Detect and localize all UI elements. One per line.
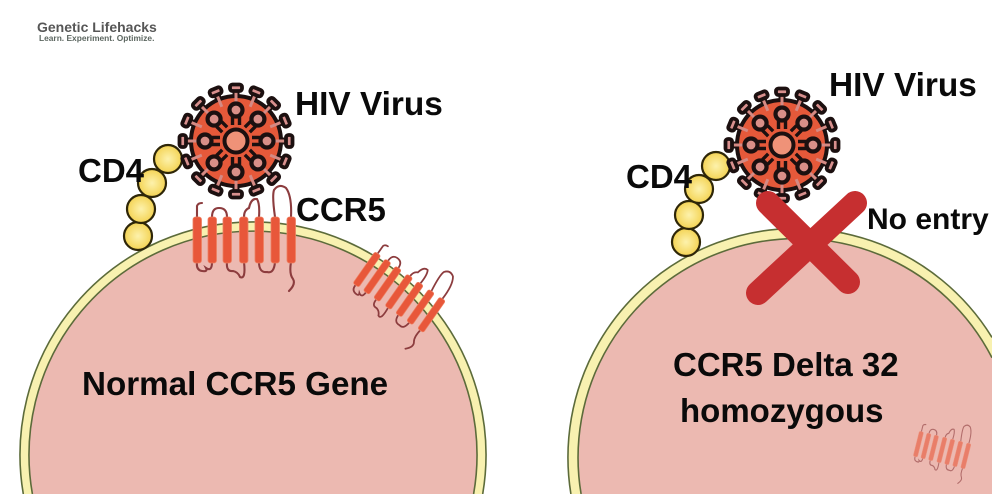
CD4 receptor beads <box>672 152 730 256</box>
label: CCR5: CCR5 <box>296 191 386 228</box>
label: CD4: CD4 <box>78 152 145 189</box>
label: HIV Virus: HIV Virus <box>295 86 443 123</box>
icon: red X no entry <box>758 203 855 293</box>
heading: CCR5 Delta 32 homozygous <box>673 346 899 429</box>
label: CD4: CD4 <box>626 158 693 195</box>
cell membrane and cytoplasm <box>20 222 486 494</box>
panel: normal CCR5 cell <box>20 84 486 494</box>
heading: CCR5 Delta 32 homozygous: homozygous <box>680 392 884 429</box>
icon: HIV virus <box>180 84 292 198</box>
logo: Genetic Lifehacks <box>37 19 157 43</box>
logo: Genetic Lifehacks: Learn. Experiment. Optimize. <box>39 33 154 43</box>
icon: faded internal CCR5 receptor <box>909 414 975 484</box>
cell membrane and cytoplasm <box>568 228 992 494</box>
icon: CCR5 receptor on cell surface <box>193 186 296 291</box>
label: No entry: No entry <box>867 203 989 236</box>
icon: CCR5 receptor rotated on cell side <box>339 230 460 352</box>
CD4 receptor beads <box>124 145 182 250</box>
panel: CCR5 Delta 32 cell <box>568 67 992 494</box>
icon: HIV virus <box>726 88 838 202</box>
label: HIV Virus: HIV Virus <box>829 67 977 104</box>
heading: Normal CCR5 Gene: Normal CCR5 Gene <box>82 366 388 403</box>
logo: Genetic Lifehacks: Genetic Lifehacks <box>37 19 157 35</box>
heading: CCR5 Delta 32 homozygous: CCR5 Delta 32 <box>673 346 899 383</box>
